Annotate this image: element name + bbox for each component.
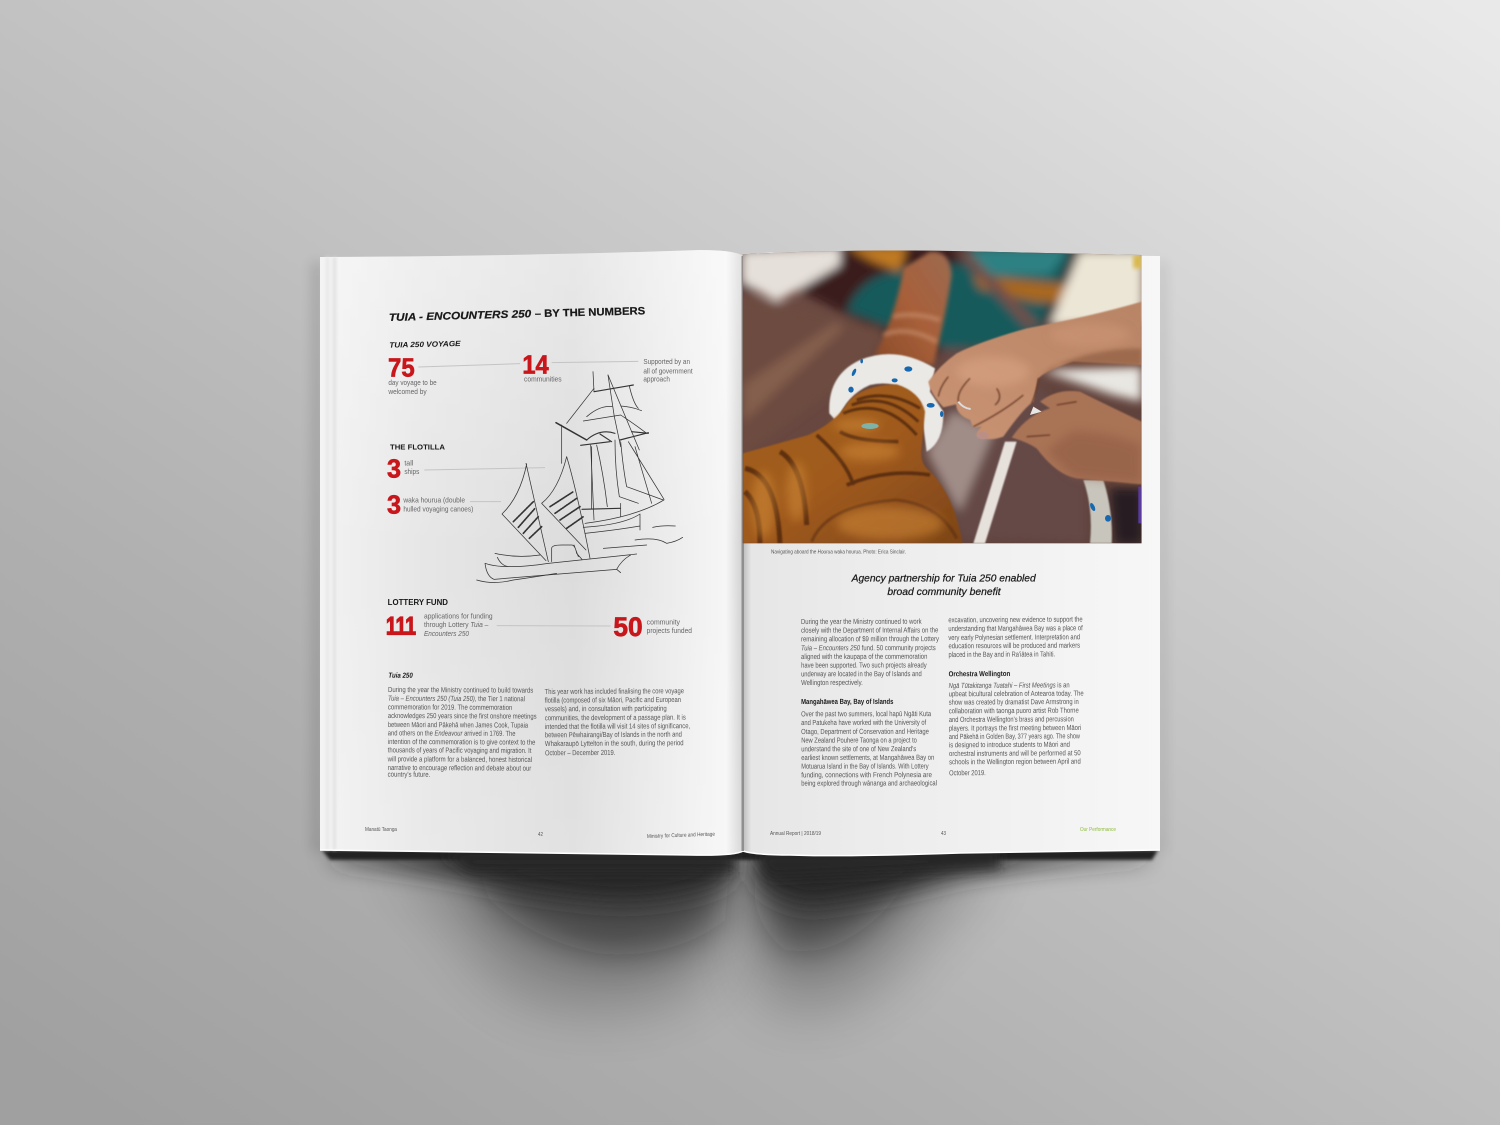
body text: Tuia 250: and others on the Endeavour arrived in 1769. The: [388, 728, 515, 738]
voyage stats: TUIA 250 VOYAGE: [389, 339, 462, 350]
lottery fund stats: [386, 598, 692, 642]
right page: [740, 245, 1160, 856]
body text: Tuia 250: Tuia – Encounters 250 (Tuia 250), the Tier 1 national: [388, 694, 525, 703]
column one: being explored through wānanga and archaeological: [801, 778, 937, 788]
column two: excavation, uncovering new evidence to support the: [948, 615, 1083, 624]
flotilla stats: THE FLOTILLA: [390, 442, 445, 451]
column one: New Zealand Pouhere Taonga on a project to: [801, 735, 917, 745]
column two: is designed to introduce students to Māori and: [949, 740, 1070, 749]
infographic: by the numbers: [386, 305, 693, 779]
lottery fund stats: Encounters 250: [424, 629, 470, 638]
body text: Tuia 250: commemoration for 2019. The commemoration: [388, 702, 512, 712]
lower rope: [1083, 480, 1112, 543]
body text: second column: [545, 686, 690, 757]
body text: second column: October – December 2019.: [545, 748, 615, 757]
illustration: tall ship and waka hourua: [477, 372, 683, 582]
flotilla stats: ships: [404, 467, 419, 476]
column one: Mangahāwea Bay, Bay of Islands: [801, 697, 893, 706]
flotilla stats: 3: [387, 489, 401, 519]
column one: During the year the Ministry continued to work: [801, 617, 922, 626]
white deck line: [973, 442, 1017, 543]
lottery fund stats: 111: [386, 612, 416, 640]
right page footer: Annual Report | 2018/19: [770, 831, 821, 837]
left page footer: 42: [538, 832, 543, 838]
lottery fund stats: 50: [613, 612, 643, 642]
column two: orchestral instruments and will be performed at 50: [949, 748, 1081, 758]
lottery fund stats: through Lottery Tuia –: [424, 620, 489, 629]
body text: Tuia 250: Tuia 250: [388, 671, 413, 680]
body text: Tuia 250: narrative to encourage reflection and debate about our: [388, 763, 532, 773]
column one: understand the site of one of New Zealand's: [801, 744, 916, 753]
lottery fund stats: community: [647, 617, 680, 626]
column two: [948, 615, 1084, 777]
left page: [320, 250, 743, 855]
column one: Wellington respectively.: [801, 678, 863, 687]
column two: education resources will be produced and markers: [948, 641, 1080, 650]
article text: [801, 574, 1084, 788]
column one: funding, connections with French Polynesia are: [801, 770, 932, 779]
body text: Tuia 250: [387, 671, 537, 779]
column one: Motuarua Island in the Bay of Islands. With Lottery: [801, 761, 929, 771]
body text: Tuia 250: acknowledges 250 years since the first onshore meetings: [388, 711, 537, 721]
flotilla stats: hulled voyaging canoes): [403, 505, 474, 514]
voyage stats: Supported by an: [643, 357, 690, 366]
rope ring: [829, 354, 943, 452]
column one: have been supported. Two such projects already: [801, 660, 927, 670]
body text: second column: communities, the development of a passage plan. It is: [545, 713, 686, 722]
column one: [801, 617, 940, 788]
column two: placed in the Bay and in Ra'iātea in Tahiti.: [948, 649, 1055, 659]
column one: Over the past two summers, local hapū Ngāti Kuta: [801, 709, 932, 718]
body text: second column: between Pēwhairangi/Bay of Islands in the north and: [545, 730, 682, 739]
left page footer: Manatū Taonga: [365, 827, 397, 833]
column two: show was created by dramatist Dave Armstrong in: [949, 697, 1079, 707]
column two: very early Polynesian settlement. Interpretation and: [948, 632, 1080, 642]
lottery fund stats: projects funded: [647, 626, 692, 635]
body text: second column: flotilla (composed of six Māori, Pacific and European: [545, 695, 681, 705]
body text: Tuia 250: country's future.: [388, 770, 430, 779]
column two: players. It portrays the first meeting between Māori: [949, 723, 1082, 733]
column two: October 2019.: [949, 768, 986, 777]
body text: Tuia 250: During the year the Ministry continued to build towards: [388, 685, 534, 695]
voyage stats: communities: [524, 374, 562, 383]
hands and forearm: [1012, 391, 1142, 484]
voyage stats: day voyage to be: [388, 378, 437, 387]
body text: second column: intended that the flotilla will visit 14 sites of significance,: [545, 721, 690, 731]
flotilla stats: 3: [387, 453, 401, 483]
carved post: [743, 384, 963, 543]
column one: remaining allocation of $9 million through the Lottery: [801, 634, 939, 643]
column two: understanding that Mangahāwea Bay was a place of: [948, 623, 1083, 633]
lottery fund stats: applications for funding: [424, 611, 493, 620]
column two: Ngā Tūtakitanga Tuatahi – First Meetings is an: [949, 680, 1070, 690]
column two: and Pākehā in Golden Bay, 377 years ago. The show: [949, 731, 1080, 741]
column two: and Orchestra Wellington's brass and percussion: [949, 714, 1074, 724]
right page footer: 43: [941, 831, 946, 837]
column one: closely with the Department of Internal Affairs on the: [801, 625, 938, 635]
left page footer: [365, 827, 715, 840]
subheading: [851, 574, 1036, 598]
right page footer: [770, 827, 1116, 837]
subheading: broad community benefit: [887, 587, 1002, 598]
body text: Tuia 250: thousands of years of Pacific voyaging and migration. It: [388, 745, 531, 755]
title: – BY THE NUMBERS: [535, 305, 645, 320]
flotilla stats: tall: [404, 459, 414, 468]
column two: Orchestra Wellington: [949, 669, 1011, 678]
flotilla stats: [387, 442, 545, 519]
left page footer: Ministry for Culture and Heritage: [647, 832, 715, 840]
column one: and Patukeha have worked with the University of: [801, 718, 927, 727]
body text: Tuia 250: intention of the commemoration is to give context to the: [388, 737, 535, 747]
voyage stats: approach: [643, 374, 670, 383]
voyage stats: welcomed by: [387, 387, 427, 396]
upper post: [875, 252, 952, 365]
voyage stats: all of government: [643, 366, 693, 375]
body text: Tuia 250: between Māori and Pākehā when James Cook, Tupaia: [388, 720, 529, 730]
column one: earliest known settlements, at Mangahāwea Bay on: [801, 753, 934, 762]
body text: Tuia 250: will provide a platform for a balanced, honest historical: [387, 754, 532, 764]
body text: second column: vessels) and, in consultation with participating: [545, 704, 667, 713]
column one: aligned with the kaupapa of the commemoration: [801, 652, 927, 661]
body text: second column: Whakaraupō Lyttelton in the south, during the period: [545, 738, 684, 748]
column two: upbeat bicultural celebration of Aotearoa today. The: [949, 689, 1084, 698]
title: TUIA - ENCOUNTERS 250: [389, 308, 531, 324]
column two: schools in the Wellington region between April and: [949, 757, 1081, 766]
title: [389, 305, 645, 324]
flotilla stats: waka hourua (double: [402, 496, 465, 505]
body text: second column: This year work has included finalising the core voyage: [545, 686, 684, 696]
column one: underway are located in the Bay of Islands and: [801, 669, 922, 678]
right page footer: Our Performance: [1080, 827, 1116, 833]
voyage stats: 14: [522, 349, 549, 379]
column one: Tuia – Encounters 250 fund. 50 community projects: [801, 643, 936, 652]
voyage stats: 75: [388, 352, 415, 382]
voyage stats: [387, 339, 693, 396]
book shadow: [312, 262, 1166, 1010]
column two: collaboration with taonga puoro artist Rob Thorne: [949, 706, 1079, 715]
subheading: Agency partnership for Tuia 250 enabled: [851, 574, 1036, 585]
column one: Otago, Department of Conservation and Heritage: [801, 727, 929, 736]
photo: hands tying rope on carved post: [740, 245, 1143, 545]
photo caption: Navigating aboard the Hourua waka hourua. Photo: Erica Sinclair.: [771, 550, 906, 556]
lottery fund stats: LOTTERY FUND: [388, 598, 448, 607]
